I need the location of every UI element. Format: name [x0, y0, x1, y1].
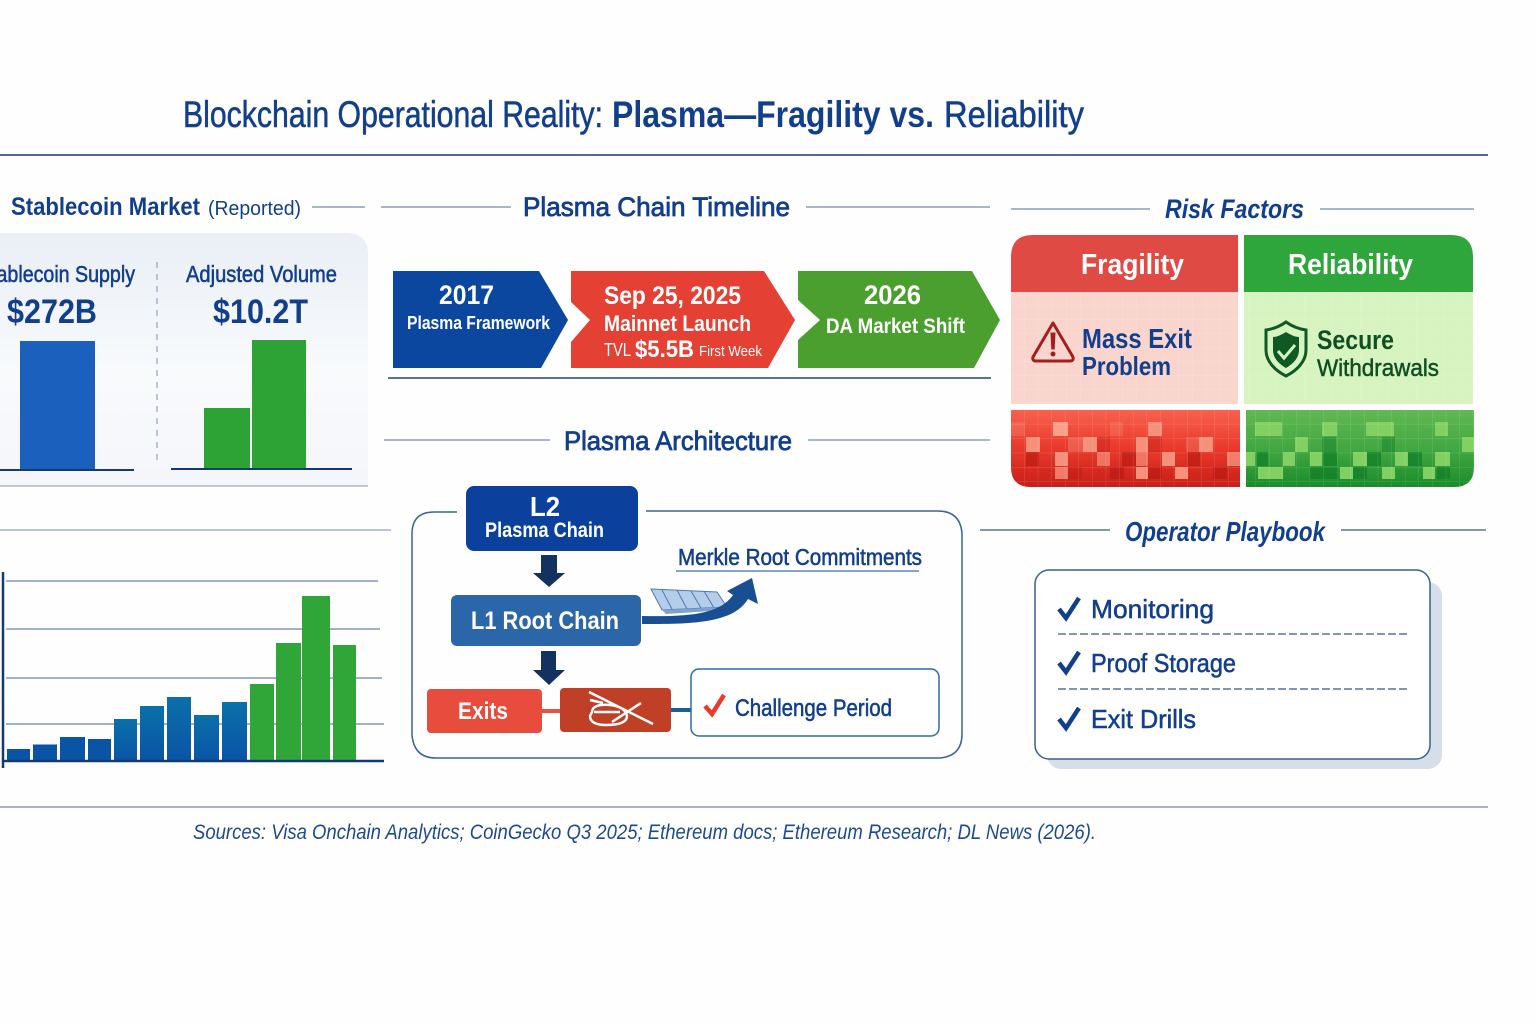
panel: plasma chain timeline	[381, 192, 1000, 378]
icon: shield	[1266, 322, 1306, 376]
arrow: 2026	[798, 271, 1000, 368]
item: monitoring: Monitoring	[1091, 594, 1214, 624]
item: exit drills: Exit Drills	[1091, 704, 1196, 734]
box: l1 root chain	[451, 595, 641, 646]
box: l1 root chain: L1 Root Chain	[471, 607, 619, 635]
arrow: sep 25 2025: Mainnet Launch	[604, 311, 751, 336]
box: l2 plasma chain: Plasma Chain	[485, 519, 604, 542]
box: l2 plasma chain: L2	[530, 491, 560, 522]
heatmap: fragility	[1011, 410, 1240, 487]
title: Reliability	[944, 94, 1084, 135]
heading: plasma architecture: Plasma Architecture	[564, 426, 792, 456]
title	[183, 94, 1084, 135]
label: merkle root commitments: Merkle Root Commitments	[678, 544, 922, 570]
text: mass exit problem: Problem	[1082, 351, 1171, 381]
arrow: 2017	[393, 271, 568, 368]
heatmap: reliability	[1246, 410, 1474, 487]
box: exits: Exits	[458, 698, 508, 725]
arrow: sep 25 2025: Sep 25, 2025	[604, 282, 741, 310]
panel: plasma architecture	[384, 426, 990, 758]
panel: stablecoin market	[0, 193, 368, 486]
arrow: sep 25 2025	[571, 271, 795, 368]
metric: stablecoin supply: $272B	[7, 293, 97, 331]
checklist card	[1035, 570, 1442, 769]
heading: stablecoin market	[11, 193, 365, 221]
text: mass exit problem	[1082, 323, 1192, 381]
arrow: merkle commitment	[642, 578, 758, 624]
icon: merkle tray	[651, 589, 727, 614]
item: proof storage: Proof Storage	[1091, 648, 1236, 678]
heading: stablecoin market: (Reported)	[208, 198, 301, 220]
title: Plasma—Fragility vs.	[612, 94, 934, 135]
arrow: l1 to exits	[533, 651, 565, 685]
metric: adjusted volume: $10.2T	[213, 293, 308, 331]
panel: operator playbook	[980, 516, 1486, 769]
arrow: sep 25 2025: TVL	[604, 340, 631, 360]
icon: warning	[1033, 323, 1073, 361]
text: secure withdrawals	[1317, 325, 1439, 382]
box: l2 plasma chain	[466, 486, 638, 551]
text: mass exit problem: Mass Exit	[1082, 323, 1192, 354]
column: reliability: Reliability	[1288, 249, 1413, 281]
metric: adjusted volume	[171, 261, 352, 469]
heading: operator playbook: Operator Playbook	[1125, 516, 1326, 547]
arrow: 2026: DA Market Shift	[826, 315, 965, 338]
text: secure withdrawals: Secure	[1317, 325, 1394, 355]
column: fragility	[1011, 235, 1238, 404]
bar chart	[0, 530, 391, 768]
heading: plasma chain timeline: Plasma Chain Timeline	[523, 192, 790, 222]
arrow: 2017: 2017	[439, 280, 494, 310]
stat card	[0, 233, 368, 486]
arrow: 2026: 2026	[864, 280, 921, 310]
column: reliability	[1244, 235, 1473, 404]
arrow: sep 25 2025: First Week	[699, 343, 762, 360]
heading: stablecoin market: Stablecoin Market	[11, 193, 201, 221]
metric: adjusted volume: Adjusted Volume	[186, 261, 337, 287]
column: fragility: Fragility	[1081, 249, 1184, 281]
title: Blockchain Operational Reality:	[183, 94, 603, 135]
heading: risk factors: Risk Factors	[1165, 194, 1304, 224]
icon: blocked exit	[560, 688, 671, 732]
arrow: l2 to l1	[533, 555, 565, 587]
box: challenge period: Challenge Period	[735, 695, 892, 722]
arrow: sep 25 2025: $5.5B	[635, 336, 694, 363]
text: secure withdrawals: Withdrawals	[1317, 355, 1439, 382]
metric: stablecoin supply	[0, 261, 135, 470]
box: challenge period	[691, 669, 939, 736]
arrow: 2017: Plasma Framework	[407, 313, 551, 333]
panel: risk factors	[1011, 194, 1474, 487]
box: exits	[427, 689, 542, 733]
sources: Sources: Visa Onchain Analytics; CoinGecko Q3 2025; Ethereum docs; Ethereum Research; DL News (2026).	[193, 821, 1096, 844]
